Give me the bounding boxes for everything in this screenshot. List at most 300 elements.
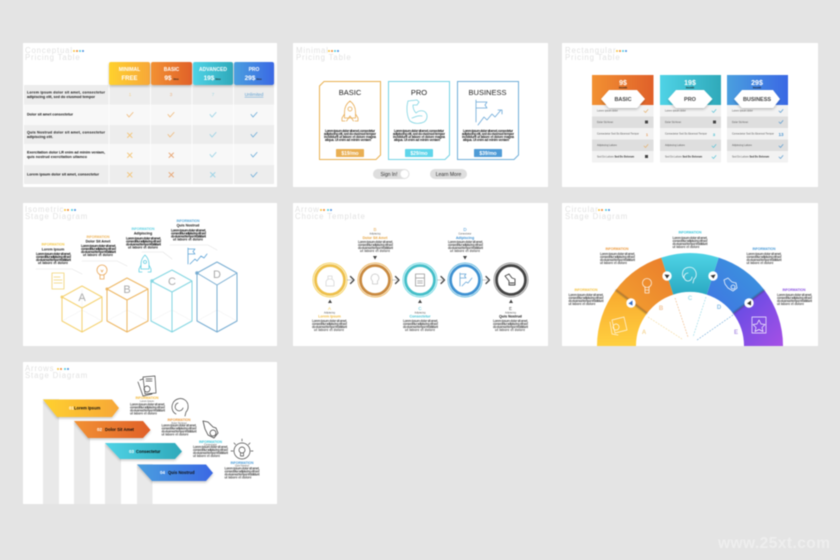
stage text A: Lorem Ipsum (318, 314, 341, 318)
stage text D: Adipiscing (456, 236, 474, 240)
stage text A: Lorem ipsum dolor sit amet, (312, 319, 347, 323)
panel: circular stage diagram (562, 203, 818, 346)
stage circle A (313, 263, 347, 297)
cube C: C (168, 276, 176, 288)
arrow 3: 03 (129, 449, 135, 454)
text block A: Lorem ipsum dolor sit amet, (568, 293, 604, 297)
card: pro: PRO (411, 88, 427, 97)
column: business: Adipiscing Labore (732, 144, 752, 147)
check and cross marks (127, 112, 257, 177)
info text 4: do eiusmod tempor incididunt (224, 472, 260, 476)
heading: arrow choice template (295, 205, 366, 221)
panel: conceptual pricing table (23, 43, 277, 187)
icon: hand on segment D (724, 278, 737, 291)
arrow 1: Lorem Ipsum (74, 406, 101, 410)
plan limits: 3 (170, 92, 173, 97)
heading: isometric stage diagram: Isometric (25, 205, 64, 214)
info text 1: consectetur adipiscing elit sed (130, 406, 165, 410)
button: sign in: Sign In! (381, 172, 397, 178)
stage text C: do eiusmod tempor incididunt (403, 325, 439, 329)
text block C (126, 227, 162, 250)
card: business: aliqua. Ut enim ad minim veniam (463, 138, 509, 142)
stage text B: B (373, 227, 377, 232)
column: business: 13 (778, 132, 784, 137)
panel: minimal pricing table (293, 43, 548, 187)
panel: rectangular pricing table (562, 43, 818, 187)
icon: light bulb (97, 265, 107, 279)
column: pro: 19$ (684, 80, 696, 87)
stage text E (493, 306, 529, 332)
row labels: Lorem ipsum dolor sit amet, consectetur (27, 172, 100, 176)
plan header: basic: 9$ (164, 75, 172, 82)
cube D: D (213, 269, 221, 281)
pointer triangles (328, 256, 513, 303)
card: business (458, 82, 518, 160)
stage text D: ut labore et dolore (450, 249, 480, 253)
column: basic: Sed Do Labore Sed Do Dolorum (597, 156, 635, 158)
arrow 2: Dolor Sit Amet (105, 427, 135, 432)
plan header: basic: BASIC (164, 67, 180, 73)
text block B: INFORMATION (86, 235, 110, 239)
text block E: Lorem ipsum dolor sit amet, (777, 293, 812, 297)
segment A (597, 290, 647, 346)
text block B: ut labore et dolore (600, 261, 627, 265)
column: pro: 3 (713, 132, 716, 137)
stage text B: ut labore et dolore (360, 249, 390, 253)
info text 1: ut labore et dolore (130, 412, 157, 416)
text block B: Lorem ipsum dolor sit amet, (600, 252, 635, 256)
text block A: ut labore et dolore (568, 302, 596, 306)
stage text D (448, 227, 484, 253)
icon: star on segment E (752, 317, 766, 333)
text block B: INFORMATION (605, 247, 629, 251)
row labels: Dolor sit amet consectetur (27, 112, 74, 116)
card: pro (388, 82, 450, 160)
stage text C: C (418, 306, 422, 311)
column: business: Sed Do Labore Sed Do Dolorum (732, 156, 770, 158)
plan header: pro: PRO (249, 67, 260, 73)
arrow 3: Consectetur (136, 449, 161, 454)
column: pro: Adipiscing Labore (665, 144, 685, 147)
column: business: Dolor Sit Amet (732, 121, 748, 124)
column: business: 29$ (751, 80, 763, 87)
row labels: adipiscing elit, sed do eiusmod tempor (27, 95, 96, 99)
icon: bulb with rays (231, 439, 253, 459)
text block D: Quis Nostrud (177, 224, 199, 228)
text block A: consectetur adipiscing elit sed (568, 296, 604, 300)
heading: circular stage diagram (565, 205, 628, 221)
info text 4: Lorem ipsum dolor sit amet, (224, 466, 260, 470)
info text 4: consectetur adipiscing elit sed (224, 470, 260, 474)
stage text E: E (509, 306, 512, 311)
segment D (707, 258, 764, 314)
segment markers (626, 271, 754, 308)
segment E (733, 290, 783, 346)
table rows (24, 85, 274, 184)
text block A: ut labore et dolore (38, 261, 68, 265)
text block C: do eiusmod tempor incididunt (126, 242, 162, 246)
info text 3 (193, 440, 229, 458)
stage text E: ut labore et dolore (495, 328, 525, 332)
text block C: INFORMATION (131, 227, 155, 231)
text block C: Lorem ipsum dolor sit amet, (126, 236, 161, 240)
info text 1 (130, 396, 166, 416)
card: basic: aliqua. Ut enim ad minim veniam (325, 138, 371, 142)
icon: documents on segment A (610, 317, 627, 335)
cube A: A (78, 292, 86, 304)
segment letters: C (688, 296, 693, 302)
info text 1: INFORMATION (135, 396, 159, 400)
stage text D: Consectetur (459, 232, 472, 236)
column: basic: Dolor Sit Amet (597, 121, 613, 124)
info text 3: Lorem ipsum dolor sit amet, (193, 445, 228, 449)
info text 4: ut labore et dolore (224, 476, 252, 480)
text block B: consectetur adipiscing elit sed (600, 255, 635, 259)
stage text D: Lorem ipsum dolor sit amet, (448, 240, 483, 244)
text block D: consectetur adipiscing elit sed (171, 232, 206, 236)
stage text E: Adipiscing (505, 312, 517, 314)
card: pro: aliqua. Ut enim ad minim veniam (394, 138, 440, 142)
info text 3: ut labore et dolore (193, 454, 220, 458)
plan limits: 1 (129, 92, 132, 97)
column: business: Lorem ipsum dolor (732, 110, 753, 112)
stage text B: do eiusmod tempor incididunt (358, 246, 394, 250)
hexagon label: PRO (684, 97, 697, 103)
row labels: Quis Nostrud dolor sit amet, consectetur (27, 130, 106, 134)
price tag: $19/mo (341, 151, 359, 157)
text block D: do eiusmod tempor incididunt (746, 258, 782, 262)
column: pro: Lorem ipsum dolor (665, 110, 686, 112)
info text 2: INFORMATION (167, 418, 191, 422)
column: pro: /month (686, 86, 695, 90)
plan header: minimal: FREE (121, 76, 138, 82)
text block E: ut labore et dolore (777, 302, 804, 306)
column: business: /month (753, 86, 762, 90)
plan header: advanced: /mo (215, 77, 221, 81)
info text 3: consectetur adipiscing elit sed (193, 448, 228, 452)
info text 3: Consectetur (204, 444, 217, 446)
icon: rocket (139, 255, 151, 272)
heading: rectangular pricing table: Pricing Table (565, 53, 621, 62)
column: basic: Lorem ipsum dolor (597, 110, 618, 112)
row labels: quis nostrud exercitation ullamco (27, 155, 88, 159)
stage circle D (448, 263, 482, 297)
stage text E: do eiusmod tempor incididunt (493, 325, 529, 329)
segment B (616, 258, 673, 314)
icon: flag and rising chart (476, 100, 502, 125)
cube A (60, 286, 102, 332)
card: basic: incididunt ut labore et dolore magna (324, 135, 376, 139)
heading: arrows stage diagram: Stage Diagram (25, 371, 88, 380)
text block A (36, 242, 72, 265)
info text 1: do eiusmod tempor incididunt (130, 408, 166, 412)
arrow 3 (105, 443, 182, 459)
text block A: Lorem Ipsum (42, 248, 64, 252)
stage text D: consectetur adipiscing elit sed (448, 243, 483, 247)
heading: conceptual pricing table: Pricing Table (25, 53, 81, 62)
row labels: adipiscing elit. (27, 135, 53, 139)
text block D: ut labore et dolore (173, 238, 203, 242)
stage text C: Consectetur (410, 314, 431, 318)
text block A (568, 288, 604, 306)
gray columns (43, 399, 152, 504)
plan header: minimal (109, 62, 150, 85)
info text 2: consectetur adipiscing elit sed (162, 426, 197, 430)
info text 4: INFORMATION (230, 461, 254, 465)
stage text D: do eiusmod tempor incididunt (448, 246, 484, 250)
segment joints (616, 290, 764, 314)
column: basic: /month (619, 86, 628, 90)
arrow 1 (43, 400, 119, 417)
heading: arrows stage diagram: Arrows (25, 364, 54, 373)
text block D: Lorem ipsum dolor sit amet, (171, 228, 206, 232)
icon: bulb on segment B (642, 278, 652, 293)
heading: rectangular pricing table: Rectangular (565, 46, 616, 55)
text block B: do eiusmod tempor incididunt (81, 250, 117, 254)
text block C: do eiusmod tempor incididunt (672, 242, 708, 246)
button: learn more (430, 169, 467, 179)
heading: minimal pricing table (296, 46, 352, 62)
card: basic: adipiscing elit, sed do eiusmod tempor (324, 132, 377, 136)
heading: minimal pricing table: Pricing Table (296, 53, 352, 62)
column: pro (660, 75, 721, 162)
plan limits: Unlimited (245, 92, 264, 97)
stage text A: Adipiscing (324, 312, 336, 314)
row labels: Exercitation dolor LR enim ad minim veniam, (27, 150, 105, 154)
card: pro: adipiscing elit, sed do eiusmod tempor (393, 132, 446, 136)
text block A: do eiusmod tempor incididunt (568, 299, 604, 303)
text block C: Adipiscing (134, 232, 152, 236)
heading: rectangular pricing table (565, 46, 627, 62)
stage text B: Adipiscing (370, 232, 381, 236)
button: sign in (373, 169, 410, 179)
info text 1: Lorem ipsum dolor sit amet, (130, 402, 165, 406)
text block B: consectetur adipiscing elit sed (81, 247, 116, 251)
icon: arm (407, 100, 427, 123)
icon: head (172, 399, 188, 416)
stage text B: Dolor Sit Amet (363, 236, 388, 240)
stage text A (312, 306, 348, 332)
panel: arrow choice template (293, 203, 548, 346)
plan header: basic: /mo (173, 77, 179, 81)
column: basic: Consectetur Sed Do Eiusmod Tempor (597, 132, 639, 136)
row labels (27, 90, 106, 176)
info text 4: Quis Nostrud (235, 464, 250, 468)
card: business: Lorem ipsum dolor sit amet, consectetur (463, 129, 514, 133)
column: business (727, 75, 788, 162)
plan limits (129, 92, 264, 97)
text block B: Dolor Sit Amet (86, 240, 111, 244)
text block E: do eiusmod tempor incididunt (777, 299, 813, 303)
text block D: INFORMATION (176, 219, 200, 223)
text block D (746, 247, 782, 265)
text block C: consectetur adipiscing elit sed (672, 239, 708, 243)
stage text C: consectetur adipiscing elit sed (403, 322, 438, 326)
text block D: do eiusmod tempor incididunt (171, 234, 207, 238)
column: basic: 1 (646, 132, 649, 137)
text block C: consectetur adipiscing elit sed (126, 240, 161, 244)
heading: arrow choice template: Arrow (295, 205, 320, 214)
plan header: advanced: 19$ (204, 75, 215, 82)
card: pro: Lorem ipsum dolor sit amet, consectetur (394, 129, 445, 133)
plan header: pro: 29$ (245, 75, 256, 82)
heading: circular stage diagram: Stage Diagram (565, 212, 628, 221)
heading: arrow choice template: Choice Template (295, 212, 366, 221)
text block B (81, 235, 117, 257)
plan header: pro (234, 62, 274, 85)
plan limits: 7 (212, 92, 215, 97)
text block B: do eiusmod tempor incididunt (600, 258, 636, 262)
text block B (600, 247, 636, 265)
icon: head on segment C (682, 267, 696, 283)
info text 3: do eiusmod tempor incididunt (193, 451, 229, 455)
arrow 1: 01 (69, 406, 75, 410)
text block B: Lorem ipsum dolor sit amet, (81, 244, 116, 248)
icon: document (52, 273, 64, 289)
connector arrows (347, 276, 490, 284)
column: basic (592, 75, 654, 162)
stage circle B (358, 263, 392, 297)
text block C: INFORMATION (678, 230, 702, 234)
column: pro: Sed Do Labore Sed Do Dolorum (665, 156, 703, 158)
card: business: adipiscing elit, sed do eiusmod tempor (462, 132, 515, 136)
segment letters: D (717, 305, 722, 311)
dashed spokes (648, 297, 733, 340)
panel: arrows stage diagram (23, 362, 277, 504)
leader lines (36, 245, 217, 274)
card: business: incididunt ut labore et dolore magna (462, 135, 514, 139)
text block B: ut labore et dolore (83, 253, 113, 257)
segment letters: B (659, 306, 664, 312)
stage text E: consectetur adipiscing elit sed (493, 322, 528, 326)
heading: minimal pricing table: Minimal (296, 46, 329, 55)
info text 3: INFORMATION (199, 440, 223, 444)
stage text C: Lorem ipsum dolor sit amet, (403, 319, 438, 323)
text block D: ut labore et dolore (746, 261, 774, 265)
column: pro: Dolor Sit Amet (665, 121, 681, 124)
text block E: INFORMATION (782, 288, 806, 292)
text block E: consectetur adipiscing elit sed (777, 296, 812, 300)
info text 4 (224, 461, 260, 480)
text block A: do eiusmod tempor incididunt (36, 258, 72, 262)
text block D (171, 219, 207, 242)
text block A: INFORMATION (574, 288, 598, 292)
segment C (661, 253, 719, 295)
text block E (777, 288, 813, 306)
info text 2: Lorem ipsum dolor sit amet, (162, 424, 197, 428)
heading: circular stage diagram: Circular (565, 205, 599, 214)
segment letters: E (734, 330, 738, 336)
arrow 4 (137, 464, 213, 481)
segment letters: A (642, 330, 647, 336)
text block C (672, 230, 708, 249)
plan header: minimal: MINIMAL (119, 67, 140, 73)
text block D: consectetur adipiscing elit sed (746, 255, 782, 259)
stage text D: D (463, 227, 467, 232)
column: business: Consectetur Sed Do Eiusmod Tempor (732, 132, 774, 136)
heading: arrows stage diagram (25, 364, 88, 380)
card: basic: Lorem ipsum dolor sit amet, consectetur (325, 129, 376, 133)
arrow 2 (74, 421, 150, 438)
button: learn more: Learn More (436, 172, 461, 178)
cube B: B (123, 284, 131, 296)
card: business: BUSINESS (469, 88, 506, 97)
info text 2: Dolor Sit Amet (171, 422, 187, 425)
cube D (195, 262, 237, 332)
stage circle C (403, 263, 437, 297)
cube B (106, 278, 148, 332)
plan header: pro: /mo (256, 77, 262, 81)
stage text B (358, 227, 394, 253)
text block A: Lorem ipsum dolor sit amet, (36, 252, 71, 256)
column: pro: Consectetur Sed Do Eiusmod Tempor (665, 132, 707, 136)
text block C: Lorem ipsum dolor sit amet, (672, 236, 708, 240)
stage text A: A (328, 306, 331, 311)
arrow 2: 02 (97, 427, 103, 432)
price tag: $39/mo (479, 151, 497, 157)
text block D: INFORMATION (752, 247, 776, 251)
plan header: advanced: ADVANCED (199, 67, 227, 73)
arrow 4: Quis Nostrud (168, 470, 195, 475)
icon: rocket (342, 101, 358, 121)
info text 2 (162, 418, 197, 436)
text block C: ut labore et dolore (128, 246, 158, 250)
row labels: Lorem ipsum dolor sit amet, consectetur (27, 90, 106, 94)
heading: isometric stage diagram (25, 205, 88, 221)
icon: hand with coin (203, 421, 218, 438)
stage text B: Lorem ipsum dolor sit amet, (358, 240, 393, 244)
heading: conceptual pricing table: Conceptual (25, 46, 73, 55)
plan header: basic (151, 62, 192, 85)
segment letters (642, 296, 738, 336)
stage text B: consectetur adipiscing elit sed (358, 243, 393, 247)
stage text E: Lorem ipsum dolor sit amet, (493, 319, 528, 323)
price tag: $29/mo (410, 151, 428, 157)
text block A: consectetur adipiscing elit sed (36, 255, 71, 259)
heading: isometric stage diagram: Stage Diagram (25, 212, 88, 221)
column: basic: Adipiscing Labore (597, 144, 617, 147)
text block A: INFORMATION (41, 242, 65, 246)
info text 1: Lorem Ipsum (140, 400, 154, 403)
info text 2: do eiusmod tempor incididunt (162, 430, 197, 434)
column: basic: 9$ (619, 80, 627, 87)
stage text A: ut labore et dolore (314, 328, 344, 332)
stage text C: Adipiscing (415, 312, 426, 314)
stage text C: ut labore et dolore (405, 328, 435, 332)
card: basic (320, 82, 380, 160)
text block D: Lorem ipsum dolor sit amet, (746, 252, 782, 256)
stage text A: do eiusmod tempor incididunt (312, 325, 348, 329)
card: pro: incididunt ut labore et dolore magna (393, 135, 445, 139)
cube C (150, 270, 192, 332)
plan header: advanced (193, 62, 233, 85)
heading: conceptual pricing table (25, 46, 84, 62)
info text 2: ut labore et dolore (162, 432, 189, 436)
stage text A: consectetur adipiscing elit sed (312, 322, 347, 326)
stage circle E (494, 263, 528, 297)
stage text E: Quis Nostrud (499, 314, 522, 318)
hexagon label: BUSINESS (743, 97, 771, 103)
hexagon label: BASIC (614, 97, 632, 103)
text block C: ut labore et dolore (672, 245, 700, 249)
panel: isometric stage diagram (23, 203, 277, 346)
icon: flag and chart (188, 248, 207, 264)
icon: documents (138, 376, 156, 396)
watermark: www.25xt.com (717, 535, 830, 552)
stage text C (403, 306, 439, 332)
card: basic: BASIC (339, 88, 362, 97)
arrow 4: 04 (160, 470, 166, 475)
